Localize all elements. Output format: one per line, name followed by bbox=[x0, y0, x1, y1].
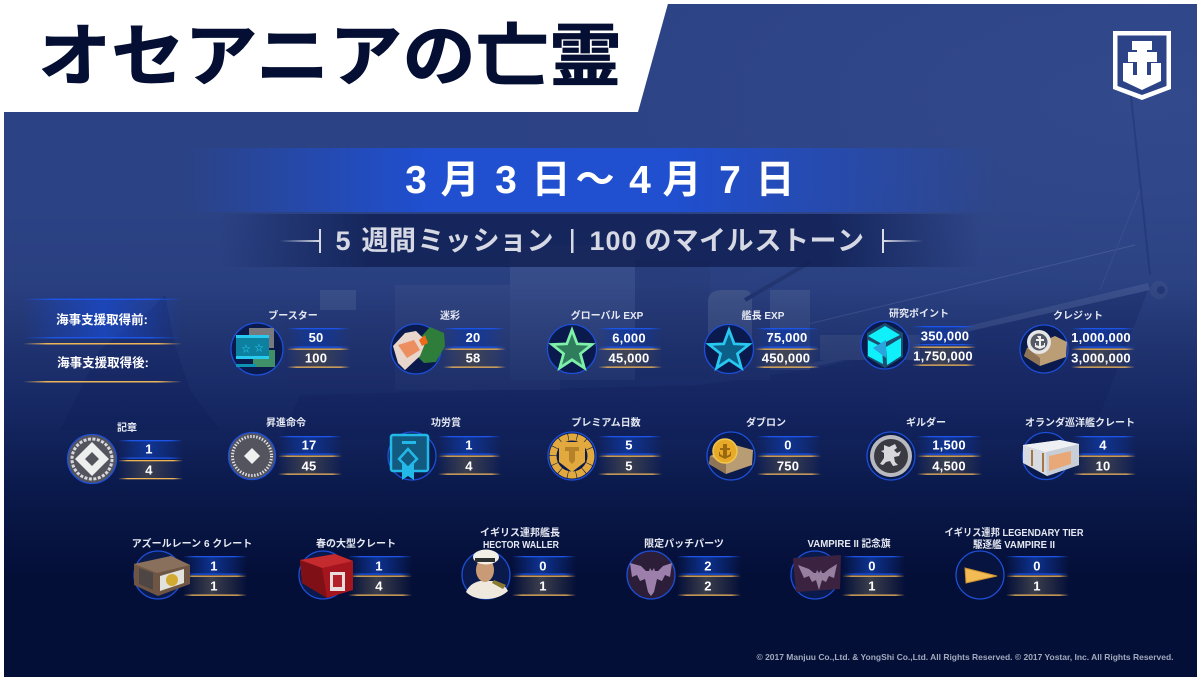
subtitle band: 100のマイルストーン bbox=[589, 226, 864, 256]
item: camouflage: 58 bbox=[466, 350, 480, 366]
item: booster bbox=[231, 309, 350, 375]
item: commander Hector Waller: HECTOR WALLER bbox=[483, 540, 560, 551]
item: credits: クレジット bbox=[1053, 310, 1103, 322]
item: promotion orders bbox=[228, 416, 342, 480]
item: Dutch cruiser crate bbox=[1022, 416, 1136, 480]
item: guilders: 4,500 bbox=[932, 458, 966, 474]
item: global EXP: 6,000 bbox=[612, 330, 646, 346]
item: captain EXP bbox=[704, 309, 819, 374]
item: merit award: 4 bbox=[465, 458, 473, 474]
title panel bbox=[0, 0, 669, 112]
legend: before and after naval support bbox=[23, 298, 182, 382]
item: spring large crate: 1 bbox=[375, 558, 383, 574]
item: Dutch cruiser crate: オランダ巡洋艦クレート bbox=[1025, 416, 1135, 429]
item: limited patch parts: 2 bbox=[704, 558, 712, 574]
item: Azur Lane crate: アズールレーン 6 クレート bbox=[132, 537, 252, 550]
item: Dutch cruiser crate: 4 bbox=[1099, 438, 1107, 452]
item: spring large crate: 4 bbox=[375, 578, 383, 594]
item: premium days: 5 bbox=[625, 458, 633, 474]
item: doubloons: ダブロン bbox=[746, 416, 786, 429]
item: camouflage bbox=[391, 309, 506, 374]
item: merit award bbox=[388, 416, 501, 480]
item: commander Hector Waller: 0 bbox=[539, 558, 547, 574]
item: spring large crate bbox=[299, 537, 412, 599]
item: Vampire II commemorative flag: VAMPIRE II 記念旗 bbox=[808, 537, 890, 550]
item: booster: ☆ bbox=[254, 343, 264, 353]
date banner bbox=[180, 148, 1000, 212]
item: limited patch parts: 2 bbox=[704, 578, 712, 594]
date banner: 3月3日～4月7日 bbox=[405, 159, 795, 202]
icon: logo shield anchor bbox=[1113, 31, 1171, 100]
item: Dutch cruiser crate: 10 bbox=[1096, 458, 1110, 474]
item: medals: 1 bbox=[145, 442, 153, 456]
item: research points: 1,750,000 bbox=[913, 348, 973, 364]
item: premium days: プレミアム日数 bbox=[571, 416, 641, 429]
item: credits: 3,000,000 bbox=[1071, 350, 1131, 366]
item: research points: 研究ポイント bbox=[889, 307, 949, 320]
item: booster: ブースター bbox=[268, 309, 318, 322]
item: Azur Lane crate: 1 bbox=[210, 578, 218, 594]
item: doubloons: 0 bbox=[784, 438, 792, 452]
subtitle band bbox=[220, 214, 980, 267]
legend: before and after naval support: 海事支援取得後: bbox=[57, 355, 149, 370]
item: captain EXP: 艦長 EXP bbox=[742, 309, 785, 322]
item: premium days: 5 bbox=[625, 438, 633, 452]
item: global EXP: 45,000 bbox=[609, 350, 649, 366]
item: Azur Lane crate: 1 bbox=[210, 558, 218, 574]
item: commander Hector Waller: 1 bbox=[539, 578, 547, 594]
item: captain EXP: 75,000 bbox=[767, 330, 807, 345]
item: Azur Lane crate bbox=[132, 537, 252, 599]
item: commander Hector Waller: イギリス連邦艦長 bbox=[480, 526, 560, 539]
item: guilders: ギルダー bbox=[906, 416, 946, 429]
subtitle band: 5週間ミッション bbox=[335, 226, 554, 256]
item: guilders bbox=[867, 416, 982, 480]
item: medals bbox=[68, 421, 183, 484]
item: promotion orders: 昇進命令 bbox=[266, 416, 306, 429]
item: Vampire II commemorative flag: 0 bbox=[868, 558, 876, 574]
item: promotion orders: 45 bbox=[302, 458, 316, 474]
legend: before and after naval support: 海事支援取得前: bbox=[56, 312, 148, 327]
item: doubloons: 750 bbox=[777, 458, 799, 474]
item: global EXP bbox=[548, 309, 662, 374]
item: merit award: 1 bbox=[465, 438, 473, 452]
item: guilders: 1,500 bbox=[932, 438, 966, 452]
item: medals: 記章 bbox=[117, 421, 137, 434]
item: research points: 350,000 bbox=[921, 328, 969, 344]
item: promotion orders: 17 bbox=[302, 438, 316, 452]
item: global EXP: グローバル EXP bbox=[571, 309, 644, 322]
item: Legendary Tier destroyer Vampire II: 1 bbox=[1033, 578, 1041, 594]
item: Vampire II commemorative flag bbox=[791, 537, 905, 599]
item: Legendary Tier destroyer Vampire II bbox=[944, 526, 1084, 599]
item: merit award: 功労賞 bbox=[431, 416, 461, 429]
item: Legendary Tier destroyer Vampire II: 0 bbox=[1033, 558, 1041, 574]
item: credits bbox=[1020, 310, 1135, 373]
item: captain EXP: 450,000 bbox=[762, 350, 810, 366]
item: doubloons bbox=[707, 416, 821, 480]
item: premium days bbox=[548, 416, 662, 480]
item: booster: 100 bbox=[305, 350, 327, 366]
item: camouflage: 迷彩 bbox=[440, 309, 460, 322]
item: medals: 4 bbox=[145, 462, 153, 478]
item: research points bbox=[861, 307, 976, 369]
title: オセアニアの亡霊 bbox=[38, 1, 622, 100]
item: limited patch parts: 限定パッチパーツ bbox=[644, 537, 724, 550]
item: spring large crate: 春の大型クレート bbox=[316, 537, 396, 550]
item: camouflage: 20 bbox=[466, 330, 480, 345]
item: limited patch parts bbox=[627, 537, 741, 599]
item: Legendary Tier destroyer Vampire II: イギリス連邦 LEGENDARY TIER bbox=[944, 526, 1084, 539]
copyright: © 2017 Manjuu Co.,Ltd. & YongShi Co.,Ltd. All Rights Reserved. © 2017 Yostar, Inc. All Rights Reserved. bbox=[756, 652, 1174, 662]
item: Vampire II commemorative flag: 1 bbox=[868, 578, 876, 594]
item: booster: 50 bbox=[309, 330, 323, 345]
item: credits: 1,000,000 bbox=[1071, 330, 1131, 345]
item: Legendary Tier destroyer Vampire II: 駆逐艦 VAMPIRE II bbox=[973, 538, 1055, 551]
item: commander Hector Waller bbox=[462, 526, 576, 599]
item: booster: ☆ bbox=[241, 344, 251, 354]
